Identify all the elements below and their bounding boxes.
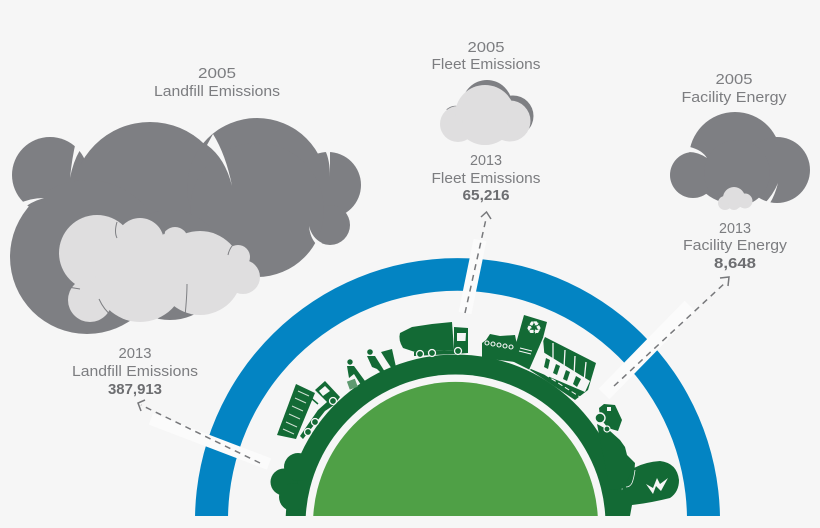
facility 2005 cloud (670, 112, 810, 206)
label: 2013 fleet: 65,216 (462, 188, 510, 204)
label: 2013 facility: Facility Energy (683, 238, 788, 254)
landfill 2005 cloud (10, 118, 361, 334)
tractor (595, 404, 622, 432)
label: 2013 landfill: Landfill Emissions (72, 364, 198, 380)
landfill arrow (138, 400, 269, 464)
label: 2013 fleet: 2013 (470, 153, 502, 169)
power plant with bolt (622, 461, 679, 516)
label: 2005 landfill: Landfill Emissions (154, 84, 280, 100)
bus (529, 337, 596, 400)
label: 2013 fleet: Fleet Emissions (432, 171, 540, 187)
tanker truck (399, 322, 468, 358)
facility 2013 cloud (718, 187, 752, 210)
recycling tower and compost bin (482, 315, 547, 370)
label: 2013 fleet (432, 153, 540, 204)
label: 2005 facility: 2005 (716, 72, 752, 88)
trees right (597, 424, 635, 490)
label: 2005 landfill: 2005 (198, 66, 236, 82)
label: 2013 facility (683, 221, 788, 272)
label: 2005 fleet: 2005 (468, 40, 504, 56)
blue ring (195, 258, 720, 516)
label: 2005 facility (682, 72, 787, 106)
fleet arrow (465, 212, 491, 313)
landfill 2013 cloud (59, 215, 260, 322)
fleet 2005 cloud (447, 80, 534, 136)
label: 2013 facility: 2013 (719, 221, 751, 237)
label: 2005 fleet (432, 40, 540, 73)
fleet 2013 cloud (440, 85, 530, 145)
label: 2013 landfill: 387,913 (108, 382, 162, 398)
trees left (270, 453, 312, 511)
recycling tower and compost bin: ♻ (526, 318, 542, 338)
label: 2005 fleet: Fleet Emissions (432, 57, 540, 73)
person with bin (367, 349, 396, 373)
person with basket (347, 359, 365, 390)
label: 2013 landfill (72, 346, 198, 398)
label: 2005 landfill (154, 66, 280, 100)
garbage truck left (277, 381, 340, 439)
facility arrow (604, 277, 729, 394)
label: 2005 facility: Facility Energy (682, 90, 787, 106)
planet (270, 354, 679, 516)
label: 2013 landfill: 2013 (118, 346, 152, 362)
label: 2013 facility: 8,648 (714, 256, 756, 272)
